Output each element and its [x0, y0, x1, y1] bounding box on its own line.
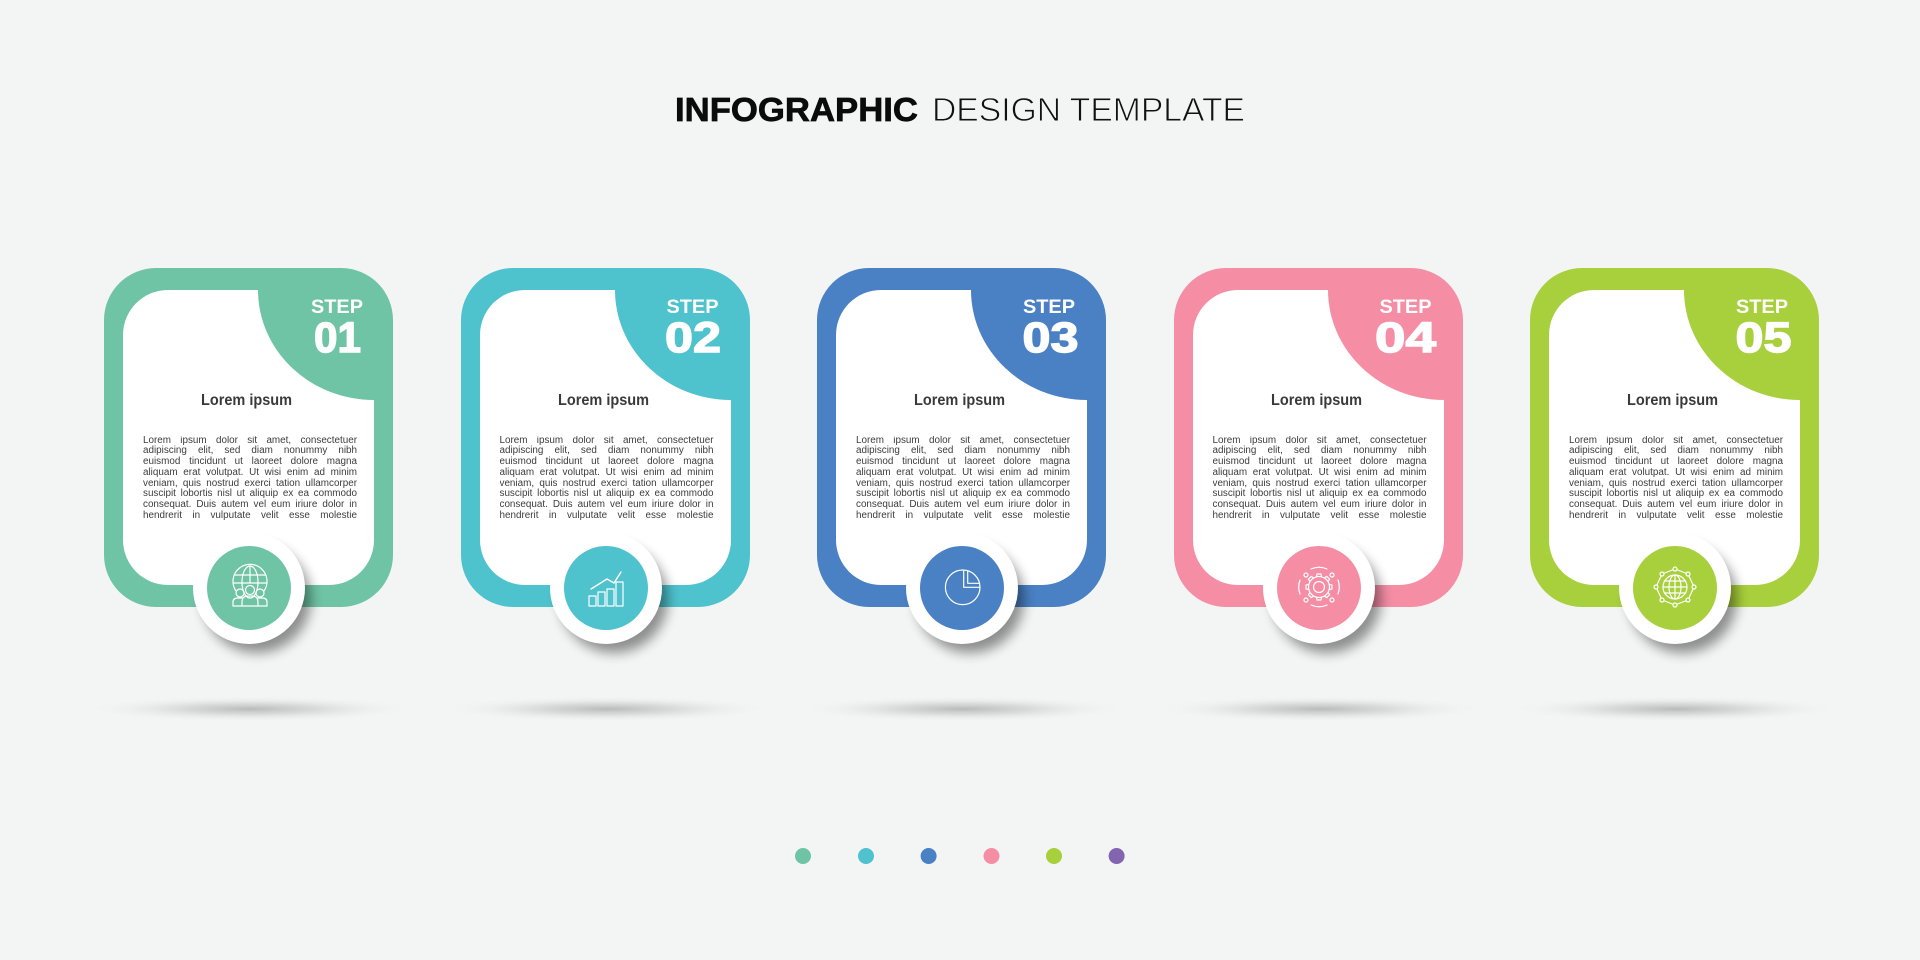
panel: step 05: STEP: [1736, 296, 1788, 318]
colour dots: [795, 848, 1125, 864]
text block: step 04: aliquam erat volutpat. Ut wisi enim ad minim: [1212, 467, 1426, 478]
ground shadow: step 1: [140, 700, 360, 718]
panel: step 04: STEP: [1379, 296, 1431, 318]
text block: step 01: aliquam erat volutpat. Ut wisi enim ad minim: [143, 467, 357, 478]
text block: step 05: suscipit lobortis nisl ut aliquip ex ea commodo: [1569, 488, 1783, 499]
panel: step 02: 02: [664, 314, 720, 362]
panel: step 01: 01: [314, 314, 361, 362]
panel: step 02: Lorem ipsum: [558, 392, 648, 409]
text block: step 04: euismod tincidunt ut laoreet dolore magna: [1212, 456, 1426, 467]
ground shadow: step 4: [1211, 700, 1430, 718]
text block: step 03: consequat. Duis autem vel eum iriure dolor in: [856, 499, 1070, 510]
text block: step 04: [1212, 436, 1426, 521]
text block: step 02: hendrerit in vulputate velit esse molestie: [500, 510, 714, 521]
text block: step 05: [1569, 436, 1783, 521]
text block: step 03: suscipit lobortis nisl ut aliquip ex ea commodo: [856, 488, 1070, 499]
panel: step 04: Lorem ipsum: [1270, 392, 1362, 409]
text block: step 02: adipiscing elit, sed diam nonummy nibh: [500, 445, 714, 456]
panel: step 04: 04: [1374, 314, 1436, 362]
panel: step 02: STEP: [666, 296, 718, 318]
text block: step 04: hendrerit in vulputate velit esse molestie: [1212, 510, 1426, 521]
panel: step 05: 05: [1736, 314, 1792, 362]
text block: step 03: euismod tincidunt ut laoreet dolore magna: [856, 456, 1070, 467]
text block: step 01: suscipit lobortis nisl ut aliquip ex ea commodo: [143, 488, 357, 499]
panel: step 03: 03: [1022, 314, 1078, 362]
panel: step 05: Lorem ipsum: [1627, 392, 1718, 409]
text block: step 01: consequat. Duis autem vel eum iriure dolor in: [143, 499, 357, 510]
text block: step 01: [143, 436, 357, 521]
text block: step 05: consequat. Duis autem vel eum iriure dolor in: [1569, 499, 1783, 510]
text block: step 03: [856, 436, 1070, 521]
panel: step 02: [461, 268, 750, 661]
text block: step 02: aliquam erat volutpat. Ut wisi enim ad minim: [500, 467, 714, 478]
text block: step 05: veniam, quis nostrud exerci tation ullamcorper: [1569, 478, 1783, 488]
panel: step 05: [1530, 268, 1819, 661]
panel: step 03: Lorem ipsum: [914, 392, 1005, 409]
panel: step 03: [817, 268, 1106, 661]
text block: step 02: suscipit lobortis nisl ut aliquip ex ea commodo: [500, 488, 714, 499]
text block: step 04: veniam, quis nostrud exerci tation ullamcorper: [1212, 478, 1426, 488]
text block: step 02: veniam, quis nostrud exerci tation ullamcorper: [500, 478, 714, 488]
title: INFOGRAPHIC: [675, 91, 918, 128]
text block: step 02: [500, 436, 714, 521]
panel: step 04: [1174, 268, 1463, 661]
ground shadow: step 5: [1566, 700, 1786, 718]
ground shadow: step 2: [497, 700, 718, 718]
text block: step 03: adipiscing elit, sed diam nonummy nibh: [856, 445, 1070, 456]
text block: step 05: adipiscing elit, sed diam nonummy nibh: [1569, 445, 1783, 456]
text block: step 01: hendrerit in vulputate velit esse molestie: [143, 510, 357, 521]
text block: step 01: euismod tincidunt ut laoreet dolore magna: [143, 456, 357, 467]
panel: step 03: STEP: [1023, 296, 1075, 318]
panel: step 01: Lorem ipsum: [201, 392, 292, 409]
text block: step 04: suscipit lobortis nisl ut aliquip ex ea commodo: [1212, 488, 1426, 499]
text block: step 05: hendrerit in vulputate velit esse molestie: [1569, 510, 1783, 521]
text block: step 02: euismod tincidunt ut laoreet dolore magna: [500, 456, 714, 467]
text block: step 04: adipiscing elit, sed diam nonummy nibh: [1212, 445, 1426, 456]
title: DESIGN TEMPLATE: [932, 91, 1245, 128]
text block: step 01: adipiscing elit, sed diam nonummy nibh: [143, 445, 357, 456]
text block: step 02: consequat. Duis autem vel eum iriure dolor in: [500, 499, 714, 510]
text block: step 05: aliquam erat volutpat. Ut wisi enim ad minim: [1569, 467, 1783, 478]
text block: step 05: euismod tincidunt ut laoreet dolore magna: [1569, 456, 1783, 467]
text block: step 03: hendrerit in vulputate velit esse molestie: [856, 510, 1070, 521]
text block: step 03: aliquam erat volutpat. Ut wisi enim ad minim: [856, 467, 1070, 478]
text block: step 04: consequat. Duis autem vel eum iriure dolor in: [1212, 499, 1426, 510]
text block: step 03: veniam, quis nostrud exerci tation ullamcorper: [856, 478, 1070, 488]
panel: step 01: [104, 268, 393, 661]
panel: step 01: STEP: [311, 296, 363, 318]
title: [675, 91, 1245, 128]
ground shadow: step 3: [854, 700, 1072, 718]
text block: step 01: veniam, quis nostrud exerci tation ullamcorper: [143, 478, 357, 488]
